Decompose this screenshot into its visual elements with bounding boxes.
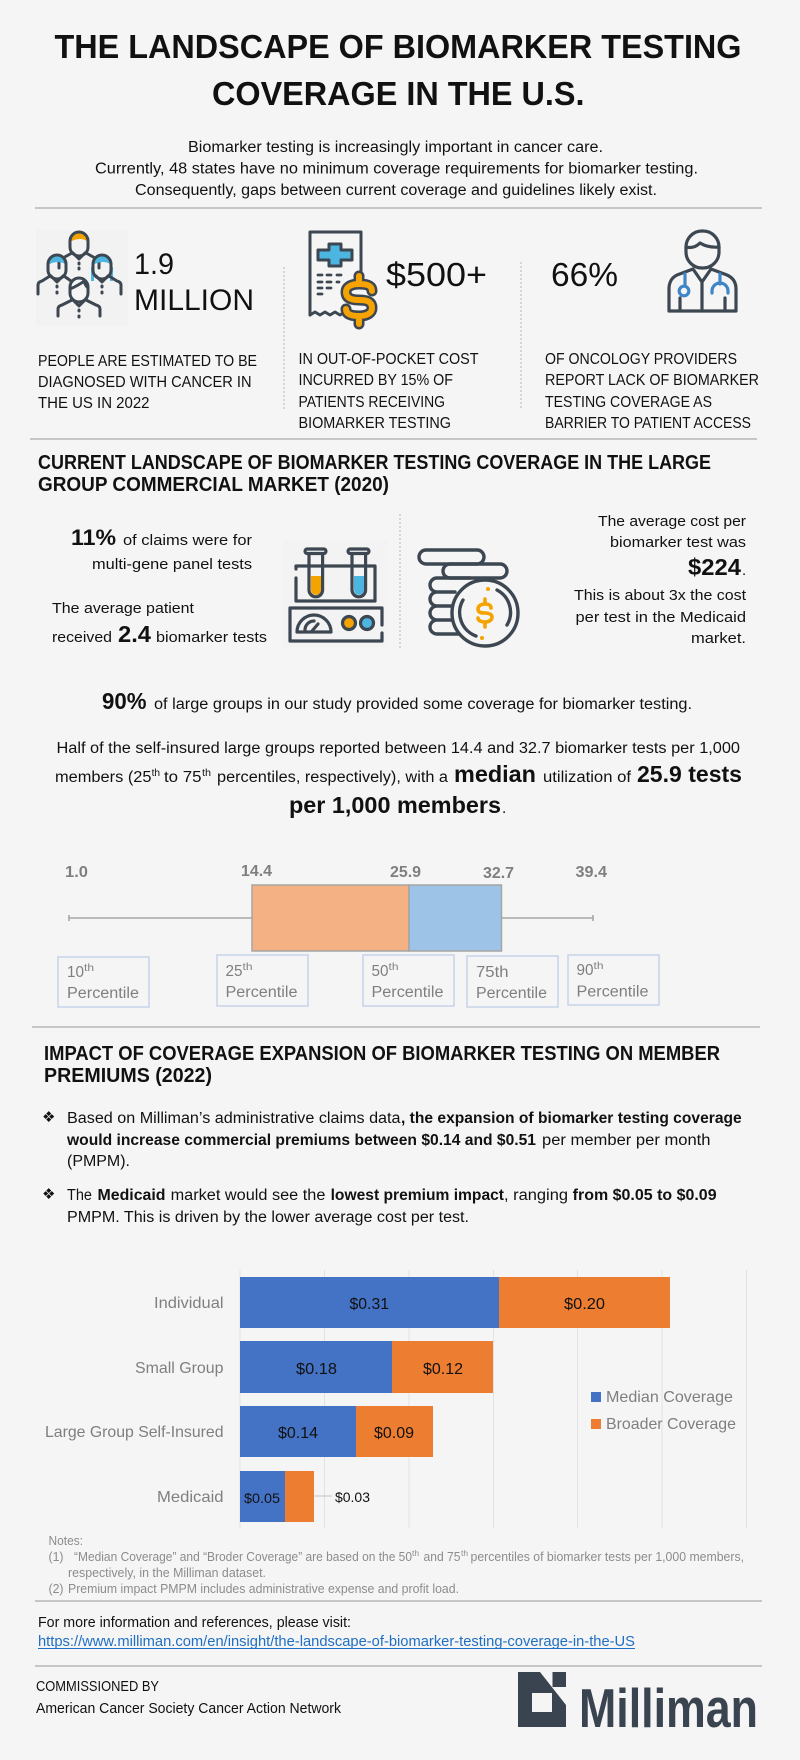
notes: Premium impact PMPM includes administrative expense and profit load. [68, 1582, 459, 1596]
more information and link: For more information and references, please visit: [38, 1614, 351, 1631]
stat: 1.9 million: MILLION [134, 284, 254, 317]
values: 1.0 [65, 864, 88, 881]
text block: median utilization: Half of the self-insured large groups reported between 14.4 and 32.7 biomarker tests per 1,000 [56, 740, 740, 757]
caption: people diagnosed: THE US IN 2022 [38, 395, 150, 412]
notes: th [461, 1549, 468, 1558]
text block: median utilization: utilization of [543, 769, 632, 786]
text block: 90% of large groups: 90% [102, 688, 146, 714]
values: 25.9 [390, 864, 421, 881]
caption: out-of-pocket cost: BIOMARKER TESTING [298, 415, 451, 432]
label: 25th percentile: Percentile [226, 984, 298, 1001]
label: 10th percentile: Percentile [67, 985, 139, 1002]
label: 50th percentile: th [388, 962, 398, 973]
legend: Median Coverage [606, 1389, 733, 1406]
logo: Milliman [518, 1672, 758, 1739]
bars: individual: $0.31 [350, 1296, 389, 1313]
values: 39.4 [576, 864, 607, 881]
logo: Milliman: Milliman [579, 1677, 758, 1739]
notes: Notes: [48, 1534, 83, 1548]
label: 90th percentile: 90 [576, 962, 594, 979]
stat: 1.9 million [134, 248, 254, 317]
bullet: medicaid premium impact: lowest premium impact [331, 1187, 504, 1204]
notes: “Median Coverage” and “Broder Coverage” are based on the 50 [74, 1550, 412, 1564]
bullet: medicaid premium impact: from $0.05 to $0.09 [573, 1187, 717, 1204]
bars: individual [240, 1277, 670, 1328]
box: 25th to 50th percentile [252, 885, 409, 951]
heading: current landscape: GROUP COMMERCIAL MARKET (2020) [38, 474, 389, 496]
icon: coin stack with dollar [419, 550, 518, 646]
label: 10th percentile: th [84, 963, 94, 974]
caption: out-of-pocket cost: PATIENTS RECEIVING [298, 394, 445, 411]
label: 10th percentile [58, 957, 149, 1007]
caption: out-of-pocket cost [298, 351, 479, 432]
label: 50th percentile: 50 [372, 963, 389, 980]
intro text [95, 139, 698, 199]
label: 90th percentile: th [594, 961, 604, 972]
text block: average cost per test: This is about 3x the cost [574, 587, 747, 604]
heading: impact of coverage expansion: PREMIUMS (2022) [44, 1065, 212, 1087]
notes: (1) [48, 1550, 64, 1564]
notes: th [412, 1549, 419, 1558]
text block: average cost per test: biomarker test was [610, 534, 746, 551]
text block: average cost per test: . [742, 562, 746, 579]
category labels: Small Group [135, 1360, 224, 1377]
text block: 90% of large groups [102, 688, 692, 714]
label: 75th percentile: 75th [476, 964, 508, 981]
chart: premium impact by market [45, 1270, 746, 1528]
notes: and 75 [424, 1550, 461, 1564]
caption: oncology providers: REPORT LACK OF BIOMARKER [545, 372, 759, 389]
panel: 1.9 million stat [36, 230, 257, 412]
text block: median utilization: 25.9 tests [637, 761, 742, 787]
bullet: medicaid premium impact [42, 1185, 717, 1226]
icon: receipt with dollar [310, 232, 372, 324]
icon: test tubes on lab device [283, 540, 388, 648]
stat: 66%: 66% [551, 257, 618, 294]
intro text: Currently, 48 states have no minimum coverage requirements for biomarker testing. [95, 160, 698, 178]
text block: median utilization: percentiles, respectively), with a [217, 769, 448, 786]
notes [48, 1534, 744, 1596]
text block: median utilization: median [454, 761, 536, 787]
caption: oncology providers: BARRIER TO PATIENT ACCESS [545, 415, 751, 432]
bars: small group [240, 1341, 493, 1393]
values [65, 863, 607, 882]
label: 25th percentile: th [242, 962, 252, 973]
heading: current landscape [38, 452, 711, 496]
bullet: medicaid premium impact: Medicaid [98, 1187, 166, 1204]
label: 90th percentile: Percentile [576, 984, 648, 1000]
bullet: medicaid premium impact: PMPM. This is driven by the lower average cost per test. [67, 1209, 469, 1226]
bullet: commercial premiums [42, 1108, 742, 1170]
notes: percentiles of biomarker tests per 1,000 members, [470, 1550, 744, 1564]
notes: (2) [48, 1582, 64, 1596]
icon: doctor with stethoscope [669, 231, 736, 311]
category labels: Large Group Self-Insured [45, 1424, 224, 1441]
bullet: commercial premiums: (PMPM). [67, 1153, 130, 1170]
bullet: medicaid premium impact: , ranging [504, 1187, 568, 1204]
label: 75th percentile: Percentile [476, 985, 547, 1002]
bars: large group self-insured [240, 1406, 433, 1457]
text block: 90% of large groups: of large groups in our study provided some coverage for biomarker testing. [154, 696, 692, 713]
bars: large group self-insured: $0.09 [374, 1425, 414, 1442]
text block: median utilization: th [152, 768, 160, 779]
commissioned by: COMMISSIONED BY [36, 1678, 159, 1695]
intro text: Consequently, gaps between current coverage and guidelines likely exist. [135, 182, 657, 199]
title [54, 29, 742, 113]
category labels: Medicaid [157, 1489, 224, 1506]
notes: respectively, in the Milliman dataset. [68, 1566, 266, 1580]
title: THE LANDSCAPE OF BIOMARKER TESTING [54, 29, 742, 66]
bars: small group: $0.12 [423, 1361, 463, 1378]
text block: claims and tests per patient: biomarker tests [156, 629, 267, 646]
text block: median utilization: th [202, 768, 211, 779]
label: 25th percentile [217, 955, 308, 1006]
text block: average cost per test: $224 [688, 554, 741, 580]
icon: group of people [36, 230, 128, 326]
stat: 1.9 million: 1.9 [134, 248, 174, 281]
bars: medicaid: $0.03 [335, 1489, 370, 1505]
bullet: commercial premiums: ❖ [42, 1108, 55, 1126]
commissioned by [36, 1678, 341, 1717]
bullet: commercial premiums: per member per month [542, 1132, 710, 1149]
box: 50th to 75th percentile [409, 885, 502, 951]
text block: median utilization: per 1,000 members [289, 792, 501, 818]
text block: claims and tests per patient: of claims were for [123, 532, 252, 549]
text block: average cost per test: The average cost per [598, 513, 746, 530]
label: 25th percentile: 25 [226, 963, 242, 980]
values: 14.4 [241, 863, 272, 880]
label: 90th percentile [568, 955, 659, 1005]
label: 10th percentile: 10 [67, 964, 84, 981]
bullet: commercial premiums: would increase commercial premiums between $0.14 and $0.51 [66, 1132, 536, 1149]
label: 50th percentile [363, 955, 454, 1006]
text block: claims and tests per patient [52, 525, 267, 647]
intro text: Biomarker testing is increasingly important in cancer care. [188, 139, 603, 156]
text block: median utilization [55, 740, 742, 818]
label: 50th percentile: Percentile [372, 984, 444, 1001]
caption: people diagnosed [38, 353, 257, 412]
text block: average cost per test: per test in the Medicaid [576, 609, 746, 626]
chart: box plot of biomarker tests per 1,000 members [58, 863, 659, 1007]
heading: impact of coverage expansion: IMPACT OF COVERAGE EXPANSION OF BIOMARKER TESTING ON MEMBER [44, 1043, 721, 1065]
panel: 66% stat [545, 231, 759, 432]
category labels: Individual [154, 1295, 224, 1312]
more information and link [38, 1614, 635, 1650]
caption: oncology providers: OF ONCOLOGY PROVIDERS [545, 351, 737, 368]
text block: average cost per test [574, 513, 747, 647]
legend [591, 1389, 736, 1433]
bars: small group: $0.18 [296, 1361, 337, 1378]
caption: people diagnosed: DIAGNOSED WITH CANCER IN [38, 374, 252, 391]
bullet: medicaid premium impact: market would see the [171, 1187, 325, 1204]
heading: current landscape: CURRENT LANDSCAPE OF BIOMARKER TESTING COVERAGE IN THE LARGE [38, 452, 711, 474]
bars: individual: $0.20 [564, 1296, 605, 1313]
bullet: commercial premiums: Based on Milliman’s administrative claims data [67, 1110, 401, 1127]
bars: large group self-insured: $0.14 [278, 1425, 318, 1442]
text block: claims and tests per patient: 2.4 [118, 621, 151, 647]
bullet: medicaid premium impact: The [67, 1187, 92, 1204]
caption: out-of-pocket cost: IN OUT-OF-POCKET COST [298, 351, 479, 368]
text block: claims and tests per patient: 11% [71, 525, 116, 550]
label: 75th percentile [467, 956, 558, 1007]
legend: Broader Coverage [606, 1416, 736, 1433]
text block: claims and tests per patient: received [52, 629, 112, 646]
stat: $500+: $500+ [386, 256, 487, 293]
bars: medicaid [240, 1471, 370, 1522]
caption: people diagnosed: PEOPLE ARE ESTIMATED TO BE [38, 353, 257, 370]
text block: median utilization: . [502, 800, 506, 817]
bars: medicaid: $0.05 [244, 1490, 280, 1506]
whisker [69, 915, 593, 921]
bullet: medicaid premium impact: ❖ [42, 1185, 55, 1203]
more information and link: https://www.milliman.com/en/insight/the-landscape-of-biomarker-testing-coverage-in-the-US [38, 1633, 635, 1650]
values: 32.7 [483, 865, 514, 882]
category labels [45, 1295, 224, 1506]
text block: median utilization: members (25 [55, 769, 152, 786]
title: COVERAGE IN THE U.S. [212, 76, 584, 113]
bullet: commercial premiums: , the expansion of biomarker testing coverage [401, 1110, 742, 1127]
caption: out-of-pocket cost: INCURRED BY 15% OF [298, 372, 453, 389]
panel: $500+ stat [298, 232, 487, 432]
caption: oncology providers: TESTING COVERAGE AS [545, 394, 712, 411]
text block: median utilization: to 75 [164, 769, 202, 786]
caption: oncology providers [545, 351, 759, 432]
text block: claims and tests per patient: multi-gene panel tests [92, 556, 252, 573]
commissioned by: American Cancer Society Cancer Action Network [36, 1700, 341, 1717]
heading: impact of coverage expansion [44, 1043, 721, 1087]
text block: average cost per test: market. [691, 630, 746, 647]
text block: claims and tests per patient: The average patient [52, 600, 195, 617]
